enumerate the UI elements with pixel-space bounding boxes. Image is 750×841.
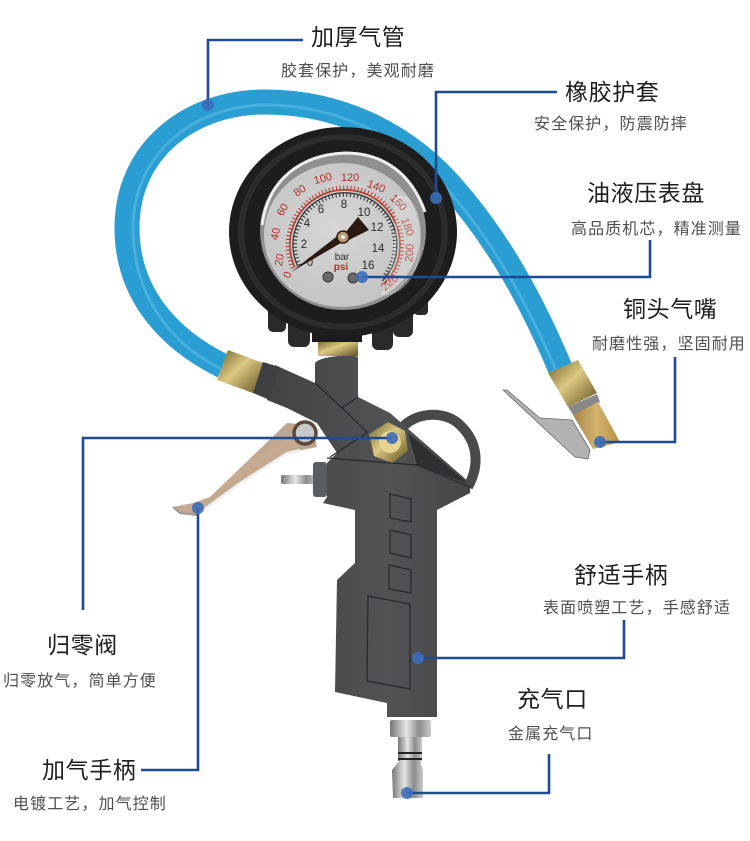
dial face [264,163,420,307]
rubber boot tabs [268,295,428,350]
bar numbers: 12 [371,222,383,234]
needle [291,217,369,272]
psi numbers [269,171,417,293]
callout: rubber boot [430,79,688,204]
callout: copper nozzle: 耐磨性强，坚固耐用 [592,335,746,353]
bar numbers: 0 [307,257,313,269]
glass reflection [382,196,420,295]
callout: copper nozzle [592,296,746,448]
air gun body [173,356,476,717]
psi numbers: 100 [313,171,333,187]
gauge neck brass [318,340,358,356]
right brass fitting and clip [503,360,620,459]
bar numbers: 14 [372,243,385,255]
psi numbers: 80 [292,183,308,199]
callout: comfort grip: 舒适手柄 [574,562,668,588]
air hose [127,102,560,370]
callout: rubber boot: 橡胶护套 [565,79,659,105]
psi numbers: 0 [281,270,295,280]
bar numbers: 8 [341,199,347,211]
psi numbers: 200 [403,243,417,263]
bar numbers: 16 [362,260,374,272]
callout: thick hose [202,24,435,111]
callout: thick hose: 加厚气管 [311,24,405,50]
callout: inflate port: 金属充气口 [508,725,594,743]
brass nose [573,402,620,449]
hose left fitting [217,350,279,400]
psi numbers: 120 [341,172,359,184]
hanging ring [402,415,476,487]
bar numbers [301,199,385,272]
callout: comfort grip: 表面喷塑工艺，手感舒适 [543,599,731,617]
psi numbers: 220 [379,273,401,293]
callout: oil gauge [356,180,742,283]
rubber boot [229,127,457,337]
unit labels: bar [335,252,350,263]
callout: rubber boot: 安全保护，防震防摔 [534,115,688,133]
bar numbers: 6 [318,204,324,216]
callout: inflate port: 充气口 [517,686,588,712]
psi numbers: 20 [273,253,287,267]
callout: oil gauge: 高品质机芯，精准测量 [571,220,742,238]
psi numbers: 180 [398,216,416,238]
bar numbers: 4 [304,218,311,230]
callout: oil gauge: 油液压表盘 [587,180,705,206]
pressure gauge [229,127,457,350]
callout: thick hose: 胶套保护，美观耐磨 [281,62,435,80]
trigger lever [173,423,317,515]
steel ring [568,394,600,416]
callout: inflate lever [13,502,204,813]
brass nut [369,422,408,463]
psi scale [288,188,402,284]
pin button [281,462,327,497]
bar numbers: 10 [358,207,370,219]
callout: inflate lever: 加气手柄 [42,757,136,783]
unit labels: psi [334,262,348,273]
callout: comfort grip [412,562,731,664]
callout: zero valve: 归零放气，简单方便 [3,672,157,690]
chuck clip lever [503,390,590,459]
callout: zero valve: 归零阀 [47,632,118,658]
lever pivot [294,422,316,444]
unit labels [334,252,350,273]
bar numbers: 2 [301,239,307,251]
bar scale [293,193,397,281]
chrome bezel [260,152,426,310]
brass collar [548,360,597,407]
grip housing [267,356,470,717]
psi numbers: 40 [269,227,283,241]
callout: zero valve [3,432,398,690]
psi numbers: 60 [275,202,291,218]
callout: inflate port [401,686,594,799]
callout: copper nozzle: 铜头气嘴 [623,296,717,322]
psi numbers: 140 [365,178,387,196]
darker facet [408,433,467,483]
callout: inflate lever: 电镀工艺，加气控制 [13,795,167,813]
dial screws [323,272,358,283]
quick coupler [390,720,431,798]
moulded grooves [315,383,470,689]
psi numbers: 160 [387,192,409,214]
